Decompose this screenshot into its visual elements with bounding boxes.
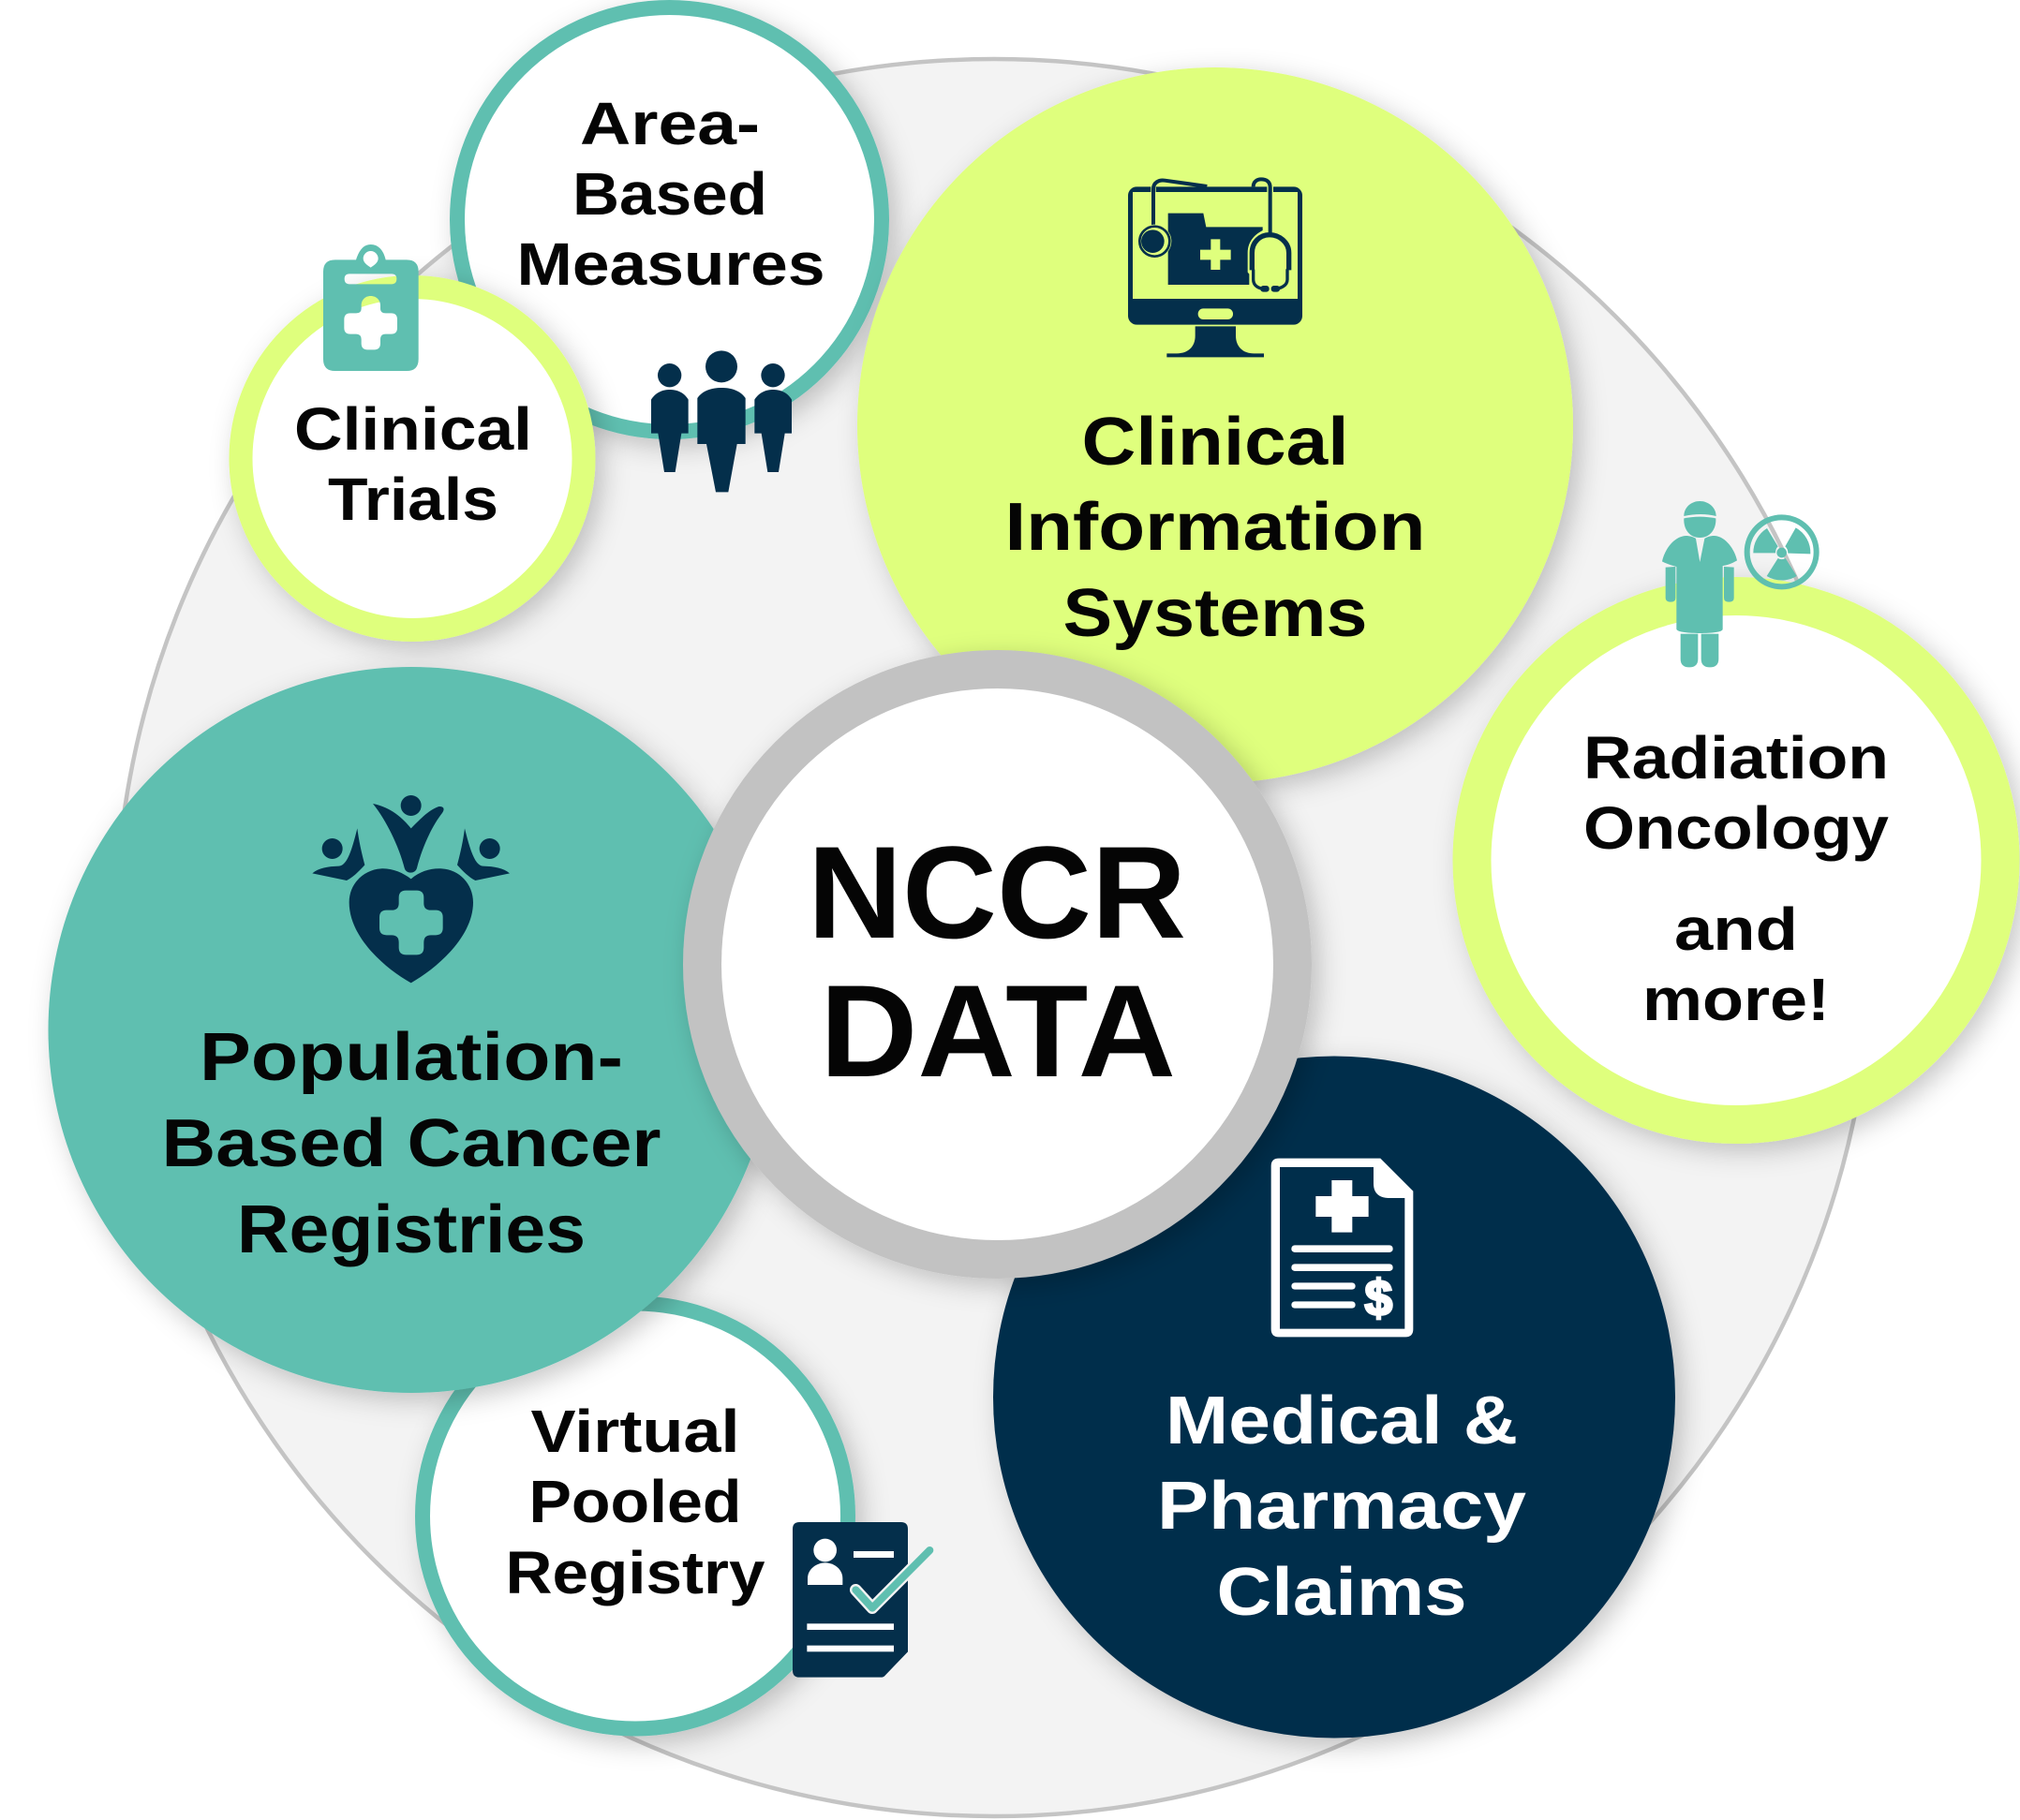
- icon: radiation oncologist with radiation symbol: [1662, 501, 1817, 667]
- text: area-based measures: Area-: [580, 90, 760, 157]
- text: clinical trials: Clinical: [294, 395, 532, 463]
- text: medical and pharmacy claims: [1157, 1383, 1526, 1630]
- text: radiation oncology and more: [1583, 724, 1889, 1033]
- panel: area-based measures: [457, 7, 882, 432]
- text: area-based measures: Based: [572, 160, 767, 228]
- text: virtual pooled registry: Registry: [506, 1539, 765, 1606]
- icon: group of people: [651, 350, 792, 492]
- title: NCCR data: DATA: [820, 957, 1176, 1104]
- text: medical and pharmacy claims: Pharmacy: [1157, 1469, 1526, 1544]
- icon: clipboard with cross: [323, 244, 419, 371]
- icon: medical bill: $: [1364, 1271, 1392, 1326]
- text: radiation oncology and more: Radiation: [1583, 724, 1889, 792]
- panel: medical and pharmacy claims: [993, 1057, 1675, 1739]
- panel: clinical trials: [241, 287, 584, 629]
- text: virtual pooled registry: [506, 1398, 765, 1606]
- icon: medical bill: [1271, 1159, 1413, 1337]
- icon: computer with folder and stethoscope: [1128, 179, 1302, 357]
- text: clinical information systems: Information: [1004, 490, 1426, 565]
- text: clinical information systems: Systems: [1062, 576, 1368, 651]
- text: clinical trials: [294, 395, 532, 533]
- panel: population-based cancer registries: [49, 667, 774, 1393]
- icon: registry document with check: [793, 1522, 929, 1678]
- text: clinical trials: Trials: [328, 466, 498, 533]
- title: NCCR data: [808, 819, 1186, 1104]
- text: virtual pooled registry: Pooled: [528, 1468, 742, 1535]
- text: area-based measures: Measures: [517, 230, 824, 298]
- panel: virtual pooled registry: [423, 1304, 848, 1729]
- text: population-based cancer registries: Registries: [237, 1192, 586, 1267]
- text: population-based cancer registries: [161, 1020, 661, 1267]
- text: clinical information systems: [1004, 405, 1426, 651]
- text: radiation oncology and more: more!: [1642, 966, 1830, 1033]
- text: medical and pharmacy claims: Claims: [1216, 1555, 1467, 1630]
- text: medical and pharmacy claims: Medical &: [1166, 1383, 1518, 1458]
- panel: clinical information systems: [857, 67, 1573, 783]
- text: radiation oncology and more: and: [1674, 895, 1798, 963]
- text: radiation oncology and more: Oncology: [1583, 794, 1889, 862]
- text: virtual pooled registry: Virtual: [530, 1398, 740, 1465]
- panel: radiation oncology and more: [1472, 596, 2000, 1124]
- panel: center NCCR data: [703, 669, 1293, 1259]
- text: clinical information systems: Clinical: [1081, 405, 1349, 480]
- text: area-based measures: [517, 90, 824, 298]
- text: population-based cancer registries: Based Cancer: [161, 1106, 661, 1181]
- text: population-based cancer registries: Population-: [200, 1020, 623, 1095]
- icon: heart with people and cross: [312, 795, 510, 983]
- title: NCCR data: NCCR: [808, 819, 1186, 966]
